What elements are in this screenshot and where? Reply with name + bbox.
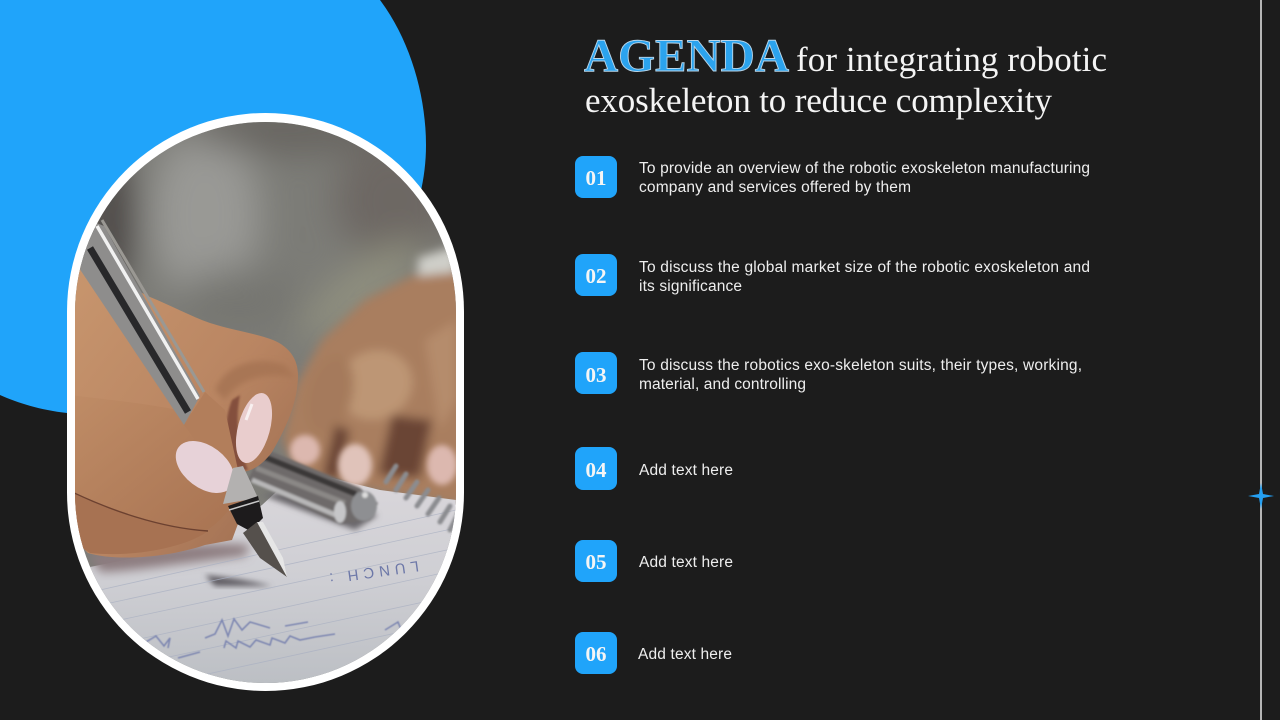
writing hand bbox=[70, 262, 298, 558]
white oval border bbox=[67, 113, 464, 691]
fingertip covering pen bbox=[184, 418, 238, 468]
shadow under pen cap bbox=[262, 490, 378, 530]
agenda item 06 bbox=[575, 632, 732, 674]
reddish shade beside nail bbox=[226, 395, 248, 470]
ring finger bbox=[75, 494, 196, 554]
agenda item 03: To discuss the robotics exo-skeleton suits, their types, working, bbox=[639, 357, 1082, 374]
agenda item 02: its significance bbox=[639, 278, 742, 295]
blurred nails on right hand bbox=[290, 435, 457, 486]
blurred right hand bbox=[282, 246, 470, 505]
agenda item 05 bbox=[575, 540, 733, 582]
agenda item 06: 06 bbox=[586, 642, 606, 666]
title line 2: exoskeleton to reduce complexity bbox=[585, 81, 1052, 120]
shadow of the hand bbox=[88, 544, 250, 572]
background blue blob bbox=[0, 0, 426, 420]
fingernails bbox=[176, 393, 272, 493]
agenda item 01: company and services offered by them bbox=[639, 179, 911, 196]
icon: blue star bbox=[1248, 483, 1274, 509]
pen shaft bbox=[75, 220, 204, 425]
agenda item 03 bbox=[575, 352, 1082, 394]
agenda item 04: 04 bbox=[586, 458, 607, 482]
agenda item 01: 01 bbox=[586, 166, 606, 190]
title word AGENDA: AGENDA bbox=[584, 30, 789, 82]
photo frame: hand writing with a fountain pen bbox=[67, 108, 470, 691]
agenda item 02: To discuss the global market size of the robotic exoskeleton and bbox=[639, 259, 1090, 276]
right vertical line with star bbox=[1248, 0, 1274, 720]
blurred grey background bbox=[82, 122, 445, 334]
agenda item 02 bbox=[575, 254, 1090, 296]
notebook paper bbox=[75, 470, 456, 683]
handwriting on the paper bbox=[146, 619, 415, 658]
agenda item 03: material, and controlling bbox=[639, 376, 806, 393]
agenda item 01: To provide an overview of the robotic exoskeleton manufacturing bbox=[639, 160, 1090, 177]
title line 1: for integrating robotic bbox=[796, 40, 1107, 79]
paper ruled lines bbox=[100, 510, 456, 680]
pen grip and nib bbox=[223, 466, 287, 577]
title bbox=[584, 30, 1107, 120]
agenda item 02: 02 bbox=[586, 264, 606, 288]
agenda item 04 bbox=[575, 447, 733, 490]
agenda item 06: Add text here bbox=[638, 646, 732, 663]
agenda item 01 bbox=[575, 156, 1090, 198]
handwritten word: LUNCH : bbox=[323, 557, 420, 587]
agenda item 05: Add text here bbox=[639, 554, 733, 571]
thumb shading bbox=[126, 511, 127, 512]
spiral notebook rings bbox=[386, 466, 458, 530]
agenda item 05: 05 bbox=[586, 550, 606, 574]
pen cap lying on notebook bbox=[248, 448, 378, 524]
agenda item 04: Add text here bbox=[639, 462, 733, 479]
agenda item 03: 03 bbox=[586, 363, 606, 387]
